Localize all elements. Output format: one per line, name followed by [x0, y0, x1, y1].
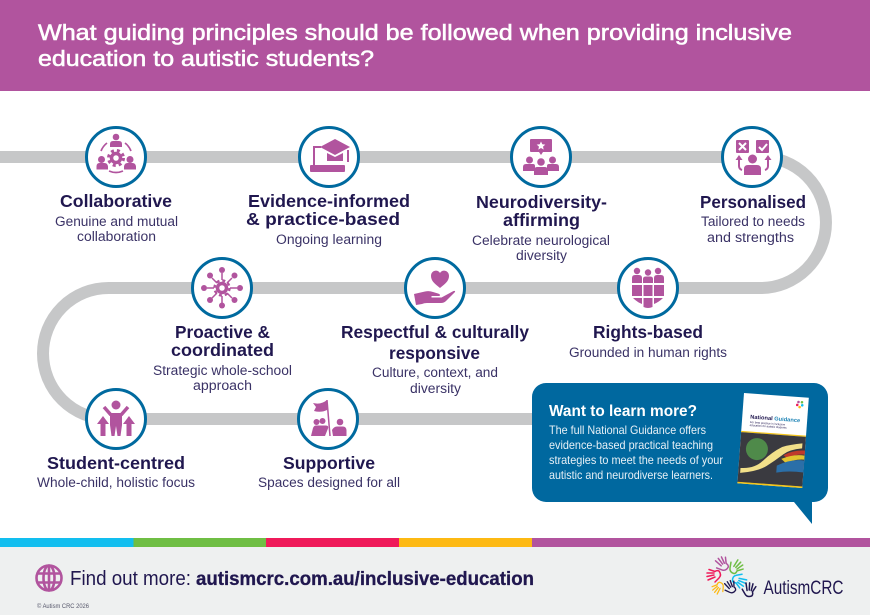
logo: AutismCRC hands: AutismCRC	[764, 578, 844, 599]
heading: Neurodiversity-	[476, 192, 607, 212]
principle: Supportive	[258, 390, 400, 490]
header banner	[0, 0, 870, 91]
heading: coordinated	[171, 340, 274, 360]
icon: laptop and graduation cap	[300, 128, 358, 186]
principle: Collaborative	[55, 128, 178, 244]
heading	[476, 192, 607, 230]
principle: Proactive and coordinated	[153, 258, 292, 393]
heading	[246, 191, 410, 229]
description: Strategic whole-school	[153, 363, 292, 378]
heading: responsive	[389, 343, 480, 363]
description	[372, 365, 498, 396]
callout heading: Want to learn more?	[549, 403, 697, 420]
footer	[0, 547, 870, 615]
description: Ongoing learning	[276, 232, 382, 247]
copyright: © Autism CRC 2026	[37, 603, 90, 610]
title: What guiding principles should be followed when providing inclusive	[38, 20, 792, 45]
icon: gear with radiating network	[192, 258, 252, 318]
heading: Supportive	[283, 453, 375, 473]
heading: Respectful & culturally	[341, 322, 529, 342]
title: education to autistic students?	[38, 46, 374, 71]
heading: Collaborative	[60, 191, 172, 211]
heading: Evidence-informed	[248, 191, 410, 211]
description	[153, 363, 292, 393]
description: collaboration	[77, 229, 156, 244]
description: Whole-child, holistic focus	[37, 475, 195, 490]
logo: AutismCRC hands	[707, 555, 844, 599]
icon: raised-arm student with arrows	[86, 390, 146, 448]
guidance document cover: National Guidance	[750, 415, 800, 424]
description: Grounded in human rights	[569, 345, 727, 360]
icon: group with star speech bubble	[512, 128, 570, 186]
description: Spaces designed for all	[258, 475, 400, 490]
principle: Student-centred	[37, 390, 195, 490]
icon: globe	[36, 566, 62, 590]
heading: Personalised	[700, 192, 806, 212]
heading: Rights-based	[593, 322, 703, 342]
icon: people over a globe	[618, 258, 678, 318]
principle: Neurodiversity-affirming	[472, 128, 610, 263]
footer: autismcrc.com.au/inclusive-education	[196, 569, 534, 590]
icon: person choosing cross or tick	[722, 128, 782, 186]
title	[38, 20, 792, 71]
description: and strengths	[707, 230, 794, 245]
icon: hand holding heart	[406, 258, 464, 318]
heading	[341, 322, 529, 363]
winding pathway track	[0, 157, 826, 419]
guidance document cover	[737, 393, 809, 488]
guidance document cover: For best practice in inclusive	[750, 420, 786, 427]
heading: & practice-based	[246, 209, 400, 229]
description	[55, 214, 178, 244]
description: diversity	[516, 248, 567, 263]
description: Tailored to needs	[701, 214, 805, 229]
callout: want to learn more	[532, 383, 828, 524]
callout text: strategies to meet the needs of your	[549, 453, 723, 467]
description: diversity	[410, 381, 461, 396]
callout text	[549, 423, 723, 482]
principle: Rights-based	[569, 258, 727, 360]
principle: Respectful and culturally responsive	[341, 258, 529, 396]
description: Culture, context, and	[372, 365, 498, 380]
icon: collaborative team gear	[86, 128, 146, 186]
callout text: autistic and neurodiverse learners.	[549, 468, 713, 482]
principle: Personalised	[700, 128, 806, 245]
description: approach	[193, 378, 252, 393]
guidance document cover: education for autistic students	[750, 423, 787, 430]
description: Celebrate neurological	[472, 233, 610, 248]
callout text: The full National Guidance offers	[549, 423, 706, 437]
description: Genuine and mutual	[55, 214, 178, 229]
description	[701, 214, 805, 245]
colour strip	[0, 538, 870, 547]
callout text: evidence-based practical teaching	[549, 438, 713, 452]
principle: Evidence-informed	[246, 128, 410, 247]
heading	[171, 322, 274, 360]
heading: affirming	[503, 210, 580, 230]
heading: Proactive &	[175, 322, 270, 342]
description	[472, 233, 610, 263]
icon: group with flag	[298, 390, 358, 448]
speech bubble	[532, 383, 828, 524]
heading: Student-centred	[47, 453, 185, 473]
link text: Find out more:	[70, 568, 191, 590]
